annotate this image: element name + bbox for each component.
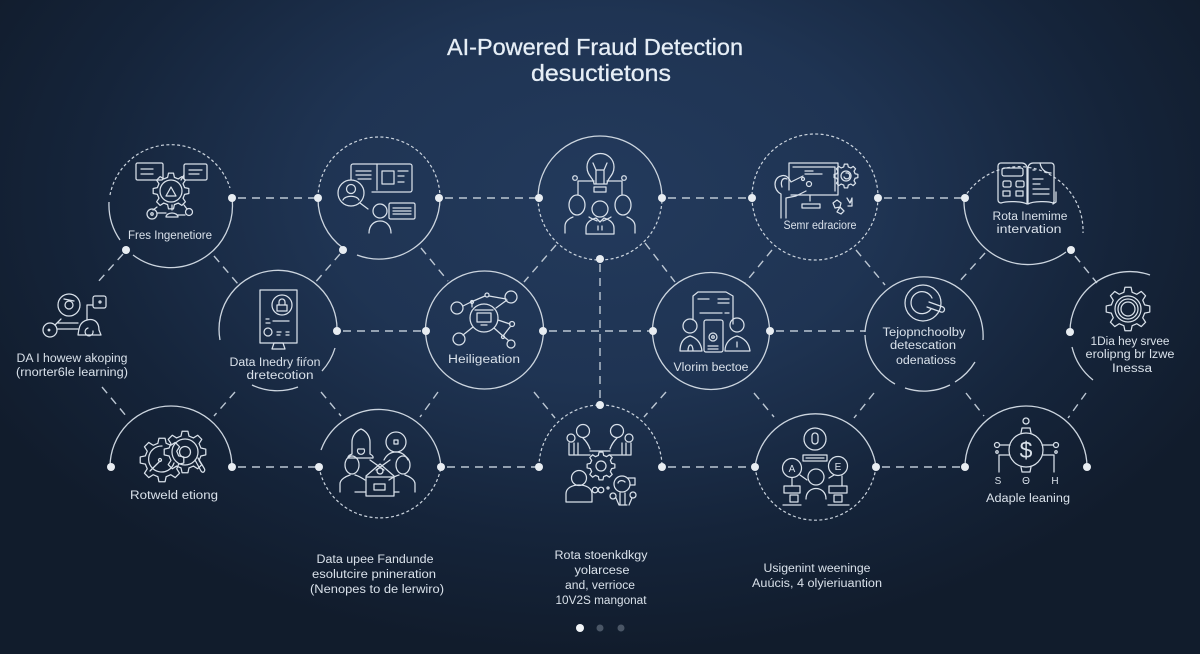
panel: data evolving xyxy=(1070,272,1174,380)
panel: data evolving: Inessa xyxy=(1112,363,1153,375)
label: 1Dia hey srvee xyxy=(1090,336,1170,348)
panel: victim protection xyxy=(652,272,770,390)
dashed connectors xyxy=(97,198,1097,467)
panel: data stewardship: yolarcese xyxy=(574,565,630,577)
panel: feature engineering xyxy=(109,145,232,268)
connector nodes xyxy=(107,194,1091,471)
panel: real-time intervention: intervation xyxy=(996,224,1062,236)
panel: data pipeline xyxy=(319,409,441,518)
text block: data pipeline description xyxy=(310,554,444,596)
panel: data shaping: (rnorter6le learning) xyxy=(16,367,128,379)
icon: dollar hub: Θ xyxy=(1022,476,1030,487)
title xyxy=(447,34,743,86)
text block: data pipeline description: esolutcire pnineration xyxy=(312,569,436,581)
icon: linked machines xyxy=(43,294,106,337)
panel: technology detection: odenatioss xyxy=(896,355,956,367)
panel: data stewardship: and, verrioce xyxy=(565,580,635,592)
icon: twin gears with wrench xyxy=(140,431,206,482)
panel: urgent warnings xyxy=(752,414,882,590)
panel: rule-based tuning xyxy=(110,406,232,502)
label: Rota stoenkdkgy xyxy=(554,550,648,562)
label: Data Inedry fiŕon xyxy=(230,357,320,369)
icon: document, phone and people xyxy=(680,292,750,352)
panel: team insight xyxy=(538,136,662,260)
text block: data pipeline description: Data upee Fandunde xyxy=(316,554,434,566)
icon: locked monitor xyxy=(260,290,297,349)
panel: analyst review xyxy=(318,137,440,259)
text block: data pipeline description: (Nenopes to de lerwiro) xyxy=(310,584,444,596)
icon: gear with chat boxes xyxy=(136,163,207,219)
panel: data stewardship xyxy=(539,405,662,607)
panel: semi-reduction xyxy=(752,134,878,260)
icon: presenter at monitor with gear xyxy=(775,163,858,218)
panel: real-time intervention xyxy=(964,163,1083,265)
label: Adaple leaning xyxy=(986,493,1070,505)
panel: data integrity detection: dretecotion xyxy=(246,370,314,382)
icon: audit team xyxy=(782,428,849,505)
panel: data integrity detection xyxy=(219,270,337,391)
icon: dollar hub xyxy=(994,418,1059,487)
icon: team with gear and magnifier xyxy=(566,424,636,505)
icon: connected nodes xyxy=(451,291,517,348)
icon: lightbulb over team xyxy=(565,154,635,234)
title: desuctietons xyxy=(531,60,671,86)
panel: data shaping xyxy=(16,294,128,379)
panel: data stewardship: 10V2S mangonat xyxy=(556,595,647,607)
icon: target with handle xyxy=(905,285,944,321)
label: DA I howew akoping xyxy=(16,353,128,365)
icon: analyst with magnifier xyxy=(338,164,415,233)
panel: adaptive learning xyxy=(965,406,1087,505)
panel: investigation xyxy=(426,271,544,389)
label: Tejopnchoolby xyxy=(882,327,966,339)
icon: large gear xyxy=(1106,287,1150,331)
label: Semr edraciore xyxy=(784,220,856,232)
panel: technology detection xyxy=(865,277,983,391)
panel: technology detection: detescation xyxy=(890,340,956,352)
label: Rota Inemime xyxy=(992,211,1068,223)
title: AI-Powered Fraud Detection xyxy=(447,34,743,60)
label: Vlorim bectoe xyxy=(674,362,748,374)
icon: dollar hub: H xyxy=(1051,476,1059,487)
icon: open book with calculator xyxy=(998,163,1056,204)
pagination dots xyxy=(576,624,624,632)
icon: audit team: A xyxy=(789,464,796,475)
label: Heiligeation xyxy=(448,354,520,366)
label: Fres Ingenetiore xyxy=(128,230,212,242)
label: Usigenint weeninge xyxy=(764,563,870,575)
icon: team around laptop xyxy=(340,429,415,496)
icon: dollar hub: S xyxy=(995,476,1002,487)
panel: data evolving: erolipng br lzwe xyxy=(1086,349,1174,361)
panel: urgent warnings: Auúcis, 4 olyieriuantion xyxy=(752,578,882,590)
label: Rotweld etiong xyxy=(130,490,218,502)
icon: audit team: E xyxy=(835,462,842,473)
icon: dollar hub: $ xyxy=(1020,437,1033,463)
